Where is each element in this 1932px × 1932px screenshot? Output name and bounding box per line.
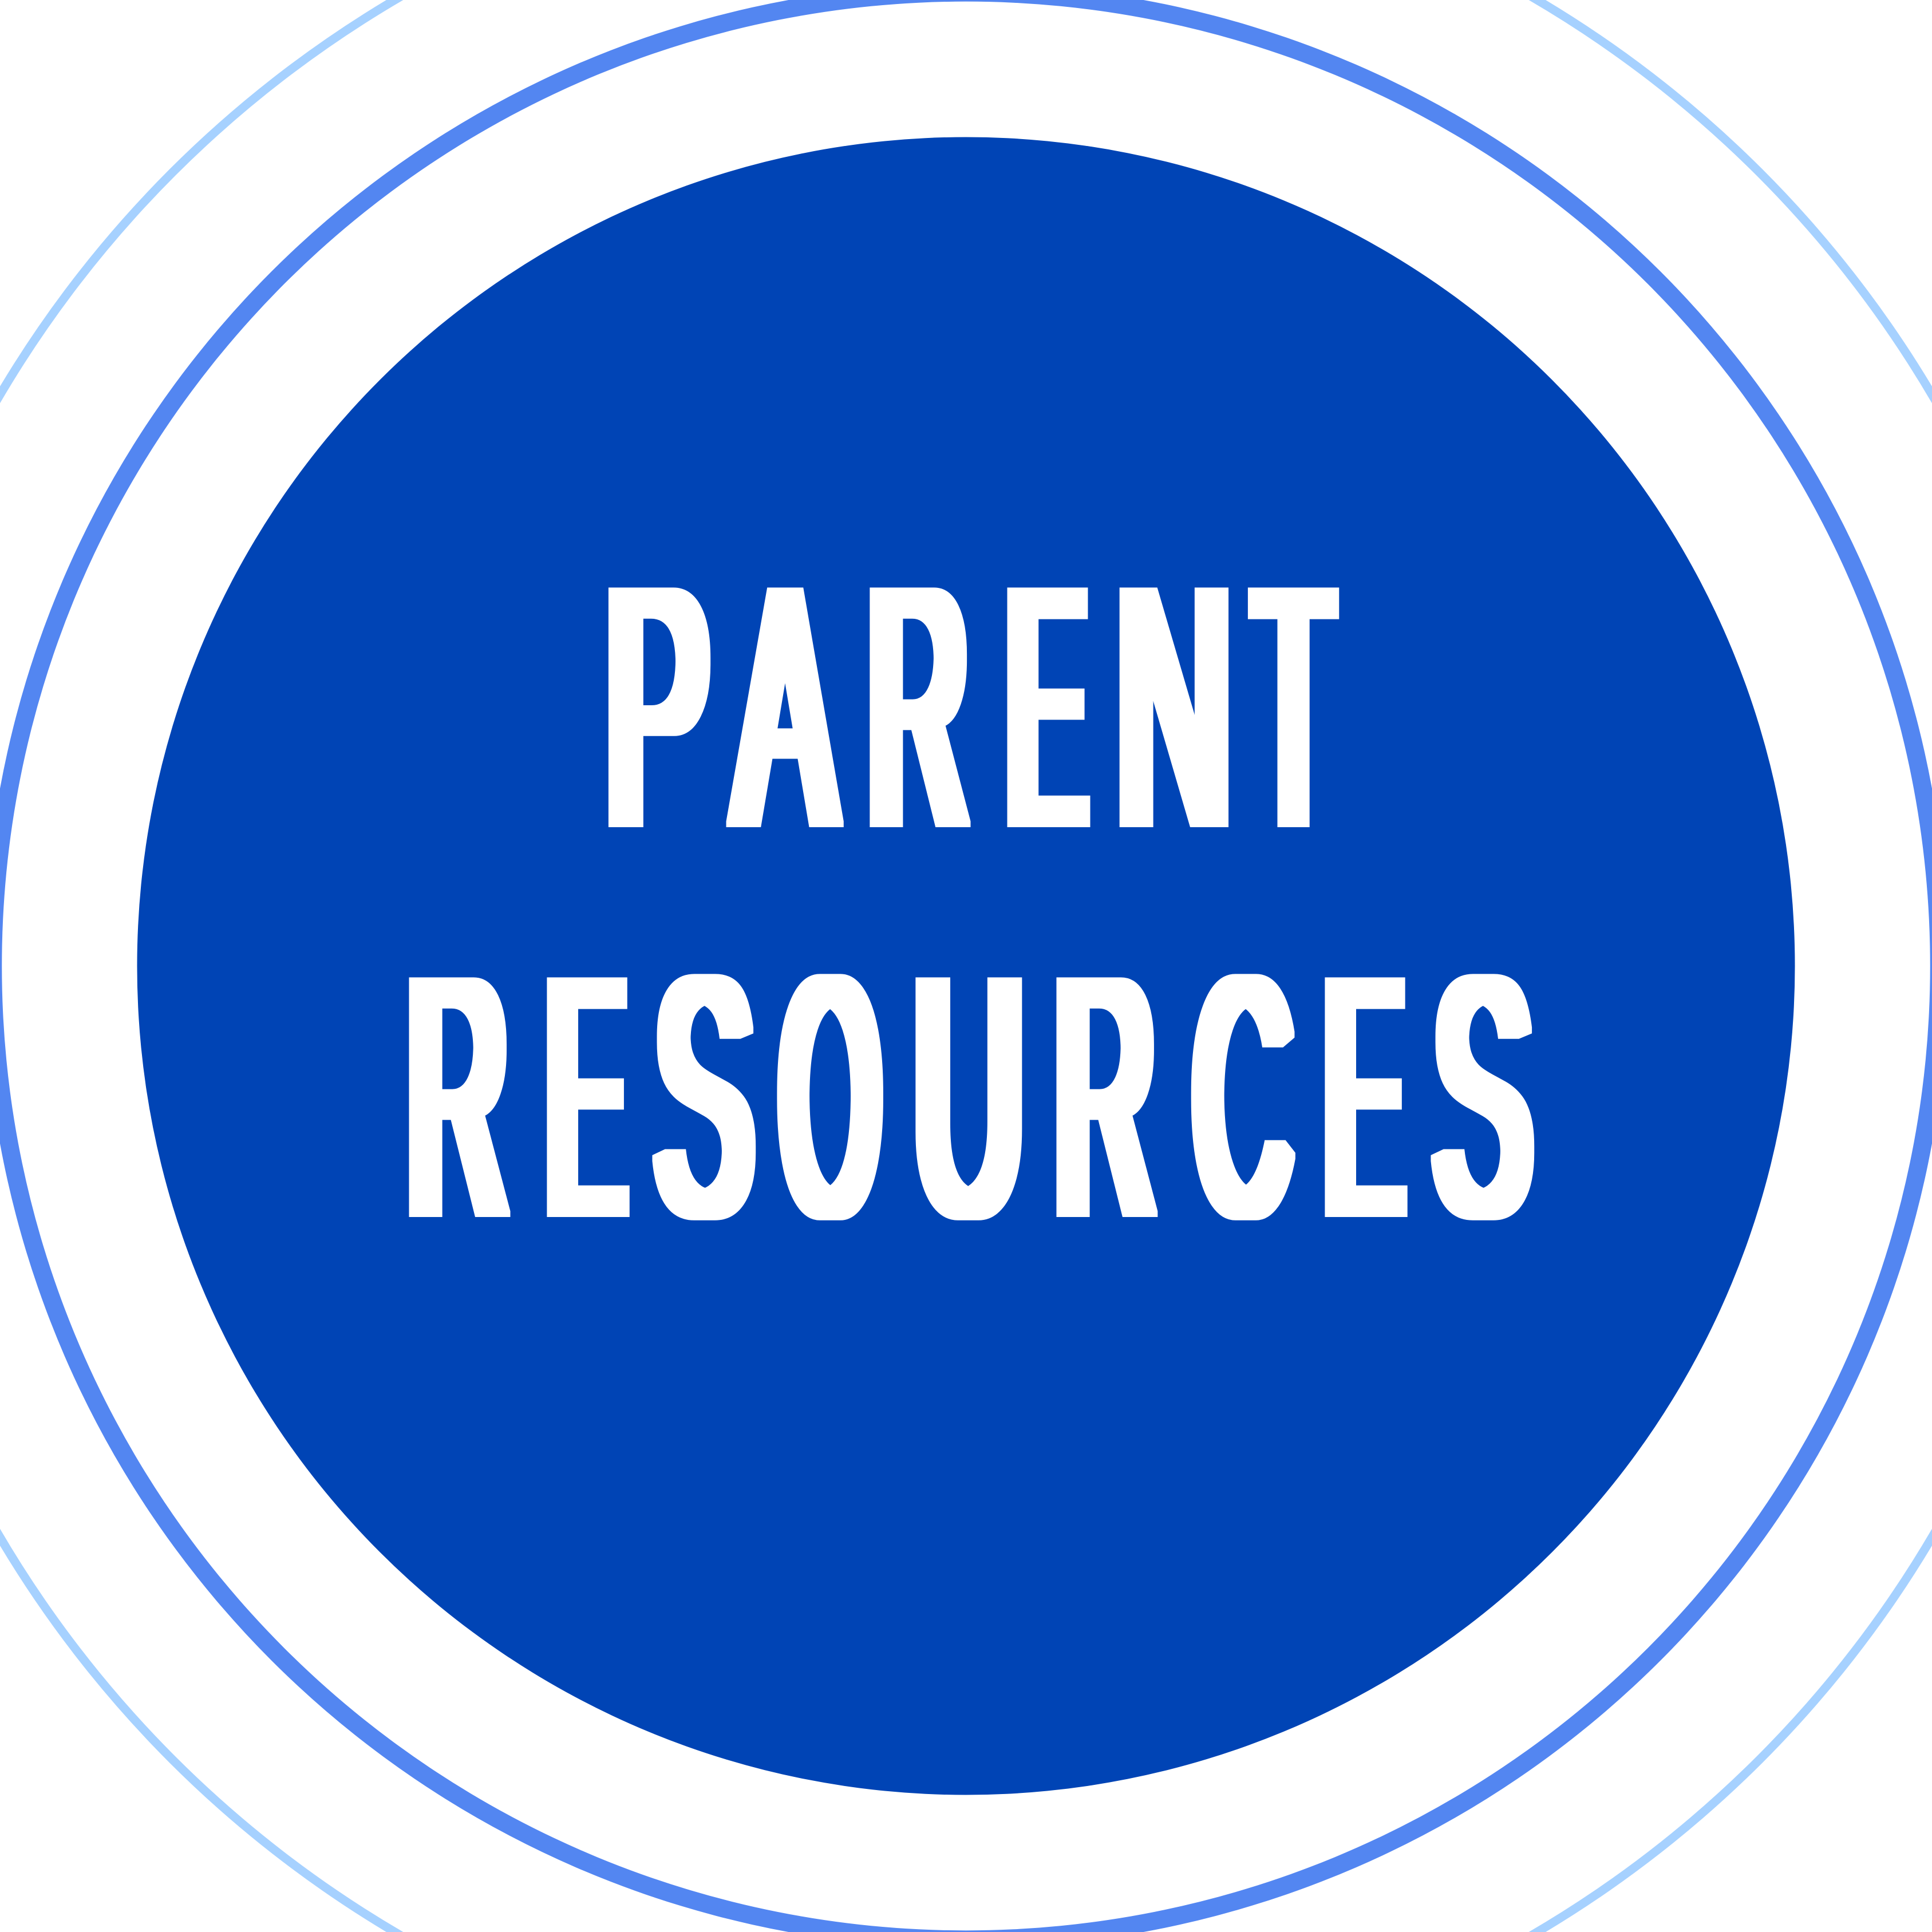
heading line: RESOURCES: E	[548, 906, 624, 1286]
heading line: RESOURCES: U	[914, 906, 1024, 1286]
heading line: RESOURCES: E	[1326, 906, 1402, 1286]
heading line: RESOURCES: C	[1194, 906, 1290, 1286]
heading line: PARENT: A	[736, 516, 834, 896]
heading line: RESOURCES: R	[1056, 906, 1153, 1286]
heading line: PARENT	[606, 516, 1340, 896]
central dark blue disc	[137, 137, 1795, 1795]
heading line: PARENT: E	[1008, 516, 1085, 896]
heading line: PARENT: T	[1255, 516, 1332, 896]
heading line: RESOURCES: S	[1435, 906, 1530, 1286]
heading line: PARENT: P	[606, 516, 708, 896]
heading line: RESOURCES: R	[408, 906, 507, 1286]
heading line: RESOURCES: O	[781, 906, 879, 1286]
heading line: RESOURCES: S	[656, 906, 752, 1286]
heading line: PARENT: R	[869, 516, 967, 896]
heading line: RESOURCES	[408, 906, 1534, 1286]
heading line: PARENT: N	[1117, 516, 1231, 896]
